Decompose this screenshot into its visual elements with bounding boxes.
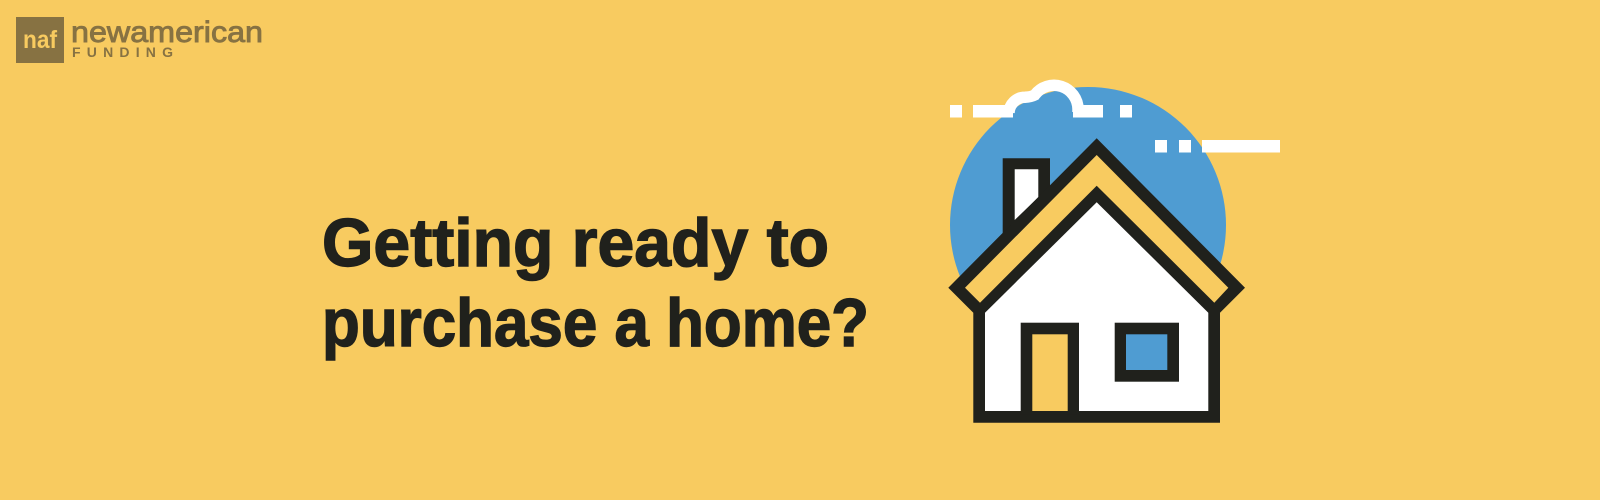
title line 1: Getting ready to — [322, 205, 829, 281]
logo wordmark: newamerican — [71, 16, 263, 49]
house wall — [985, 202, 1208, 411]
house outline — [948, 138, 1245, 423]
icon: cloud and wind dashes — [950, 85, 1280, 152]
icon: house illustration — [948, 85, 1280, 423]
window — [1115, 323, 1179, 382]
logo: New American Funding — [16, 16, 263, 63]
roof band — [965, 155, 1228, 303]
chimney — [1003, 158, 1050, 240]
logo badge — [16, 17, 64, 63]
door — [1021, 323, 1079, 415]
logo badge: naf — [23, 26, 58, 54]
blue sun circle — [950, 87, 1226, 363]
title line 2: purchase a home? — [322, 285, 869, 361]
logo subtitle: FUNDING — [72, 44, 173, 60]
title — [322, 205, 869, 361]
